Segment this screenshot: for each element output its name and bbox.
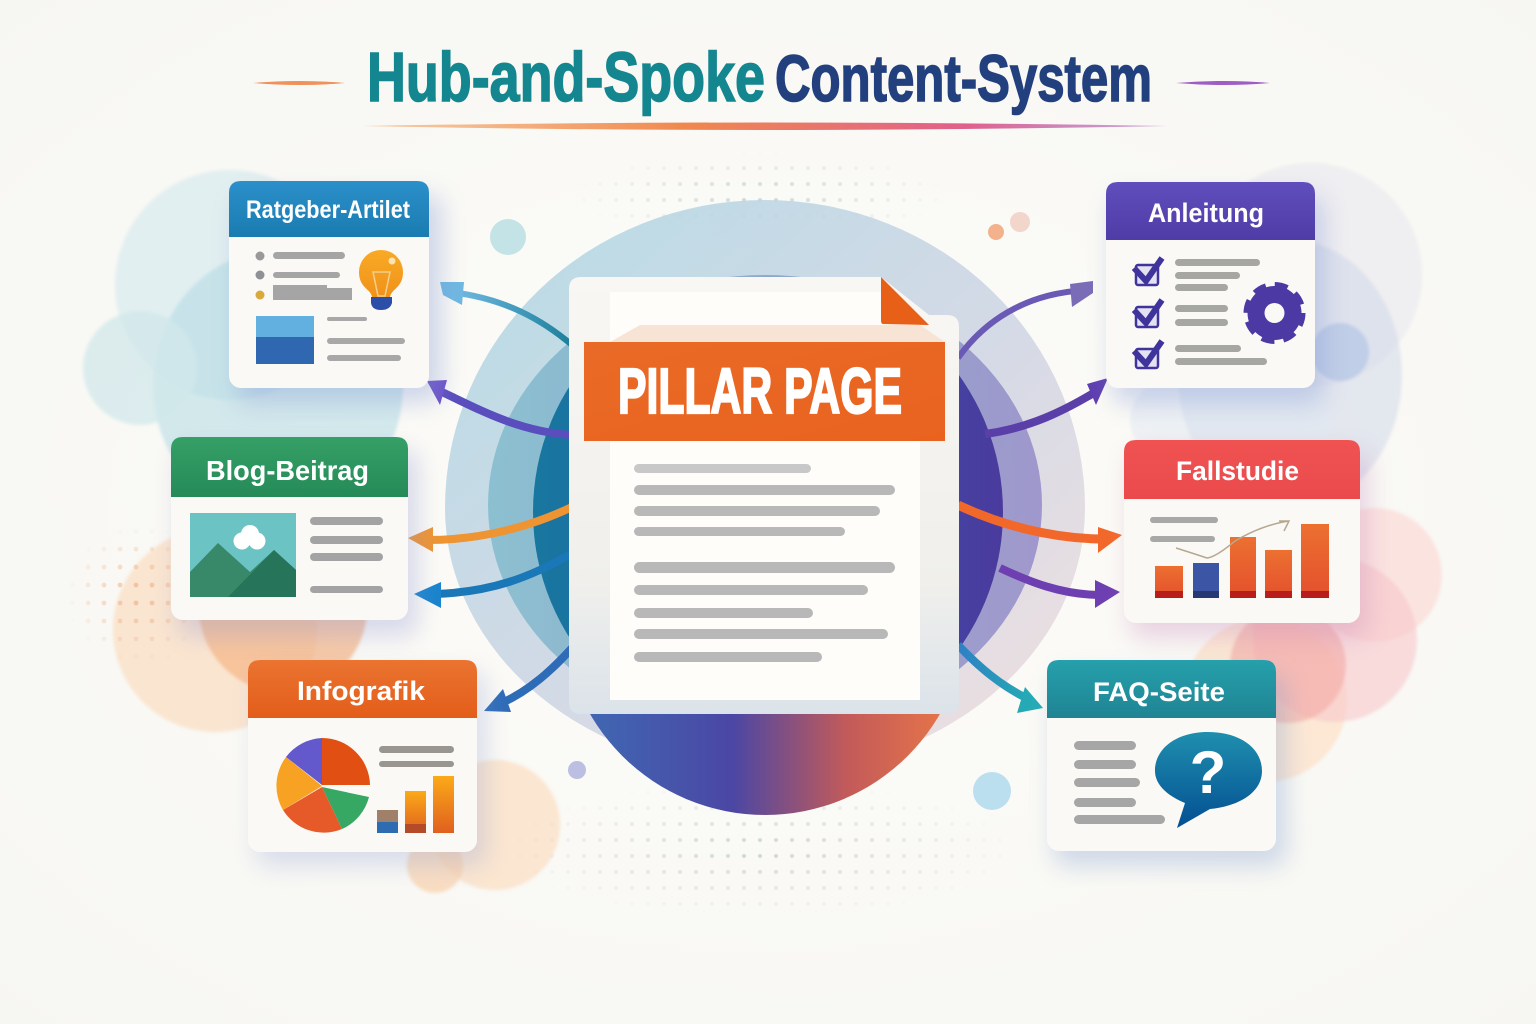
text lines (379, 746, 454, 767)
dot pattern: bottom (550, 806, 970, 906)
banner label: PILLAR PAGE (618, 355, 902, 427)
arrow to Anleitung upper (958, 281, 1093, 358)
title: Content-System (775, 41, 1152, 115)
bar chart (377, 776, 454, 833)
decorative blobs: purple right (1130, 163, 1422, 510)
card: Fallstudie (1124, 440, 1368, 638)
hub circles (445, 200, 1085, 815)
small circles (490, 212, 1030, 810)
card: Anleitung (1106, 182, 1324, 404)
text lines (1074, 741, 1165, 824)
dot pattern: left (72, 532, 186, 642)
pillar page document (569, 277, 959, 714)
arrow to FAQ-Seite (958, 645, 1043, 713)
card heading: FAQ-Seite (1093, 677, 1225, 707)
banner back fold (610, 325, 945, 342)
card: Ratgeber-Artikel (229, 181, 442, 403)
title (253, 38, 1270, 130)
card: Blog-Beitrag (171, 437, 418, 636)
text lines (327, 317, 405, 361)
arrow to Infografik (484, 648, 572, 712)
card heading: Blog-Beitrag (206, 455, 369, 486)
card heading: Fallstudie (1176, 456, 1299, 486)
arrow to Anleitung lower (985, 378, 1108, 434)
banner (584, 342, 945, 441)
inner paper sheet (610, 292, 920, 700)
card: FAQ-Seite (1047, 660, 1286, 866)
icon: question speech bubble (1155, 732, 1262, 828)
text lines (1175, 259, 1267, 365)
decorative blobs: orange left (113, 524, 560, 893)
checklist icons (1134, 258, 1162, 368)
arrow to Ratgeber-Artikel lower (427, 380, 572, 435)
icon: question speech bubble: ? (1190, 739, 1226, 806)
arrow to Blog-Beitrag orange (408, 507, 572, 552)
arrow to Blog-Beitrag blue (414, 553, 572, 608)
text lines (1150, 517, 1218, 542)
arrow to Fallstudie orange (958, 505, 1122, 553)
bar chart (1155, 524, 1329, 598)
infographic canvas (70, 50, 1443, 906)
icon: gear (1246, 285, 1302, 341)
arrow to Ratgeber-Artikel (440, 282, 572, 345)
icon: light bulb (359, 250, 403, 310)
dot pattern: top (614, 166, 906, 218)
text lines (310, 517, 383, 593)
card heading: Ratgeber-Artilet (246, 196, 411, 224)
folded corner (881, 277, 929, 325)
card: Infografik (248, 660, 486, 866)
title: Hub-and-Spoke (367, 38, 765, 116)
trend line (1176, 521, 1289, 558)
card heading: Anleitung (1148, 198, 1264, 228)
pie chart (276, 738, 370, 833)
image block (256, 316, 314, 364)
card heading: Infografik (297, 676, 426, 706)
image placeholder (190, 513, 296, 597)
decorative blobs: pink right (1183, 508, 1442, 782)
arrow to Fallstudie purple (1000, 568, 1120, 608)
decorative blobs: blue left (83, 170, 403, 520)
bullet list (256, 252, 352, 300)
body text lines (634, 464, 895, 662)
